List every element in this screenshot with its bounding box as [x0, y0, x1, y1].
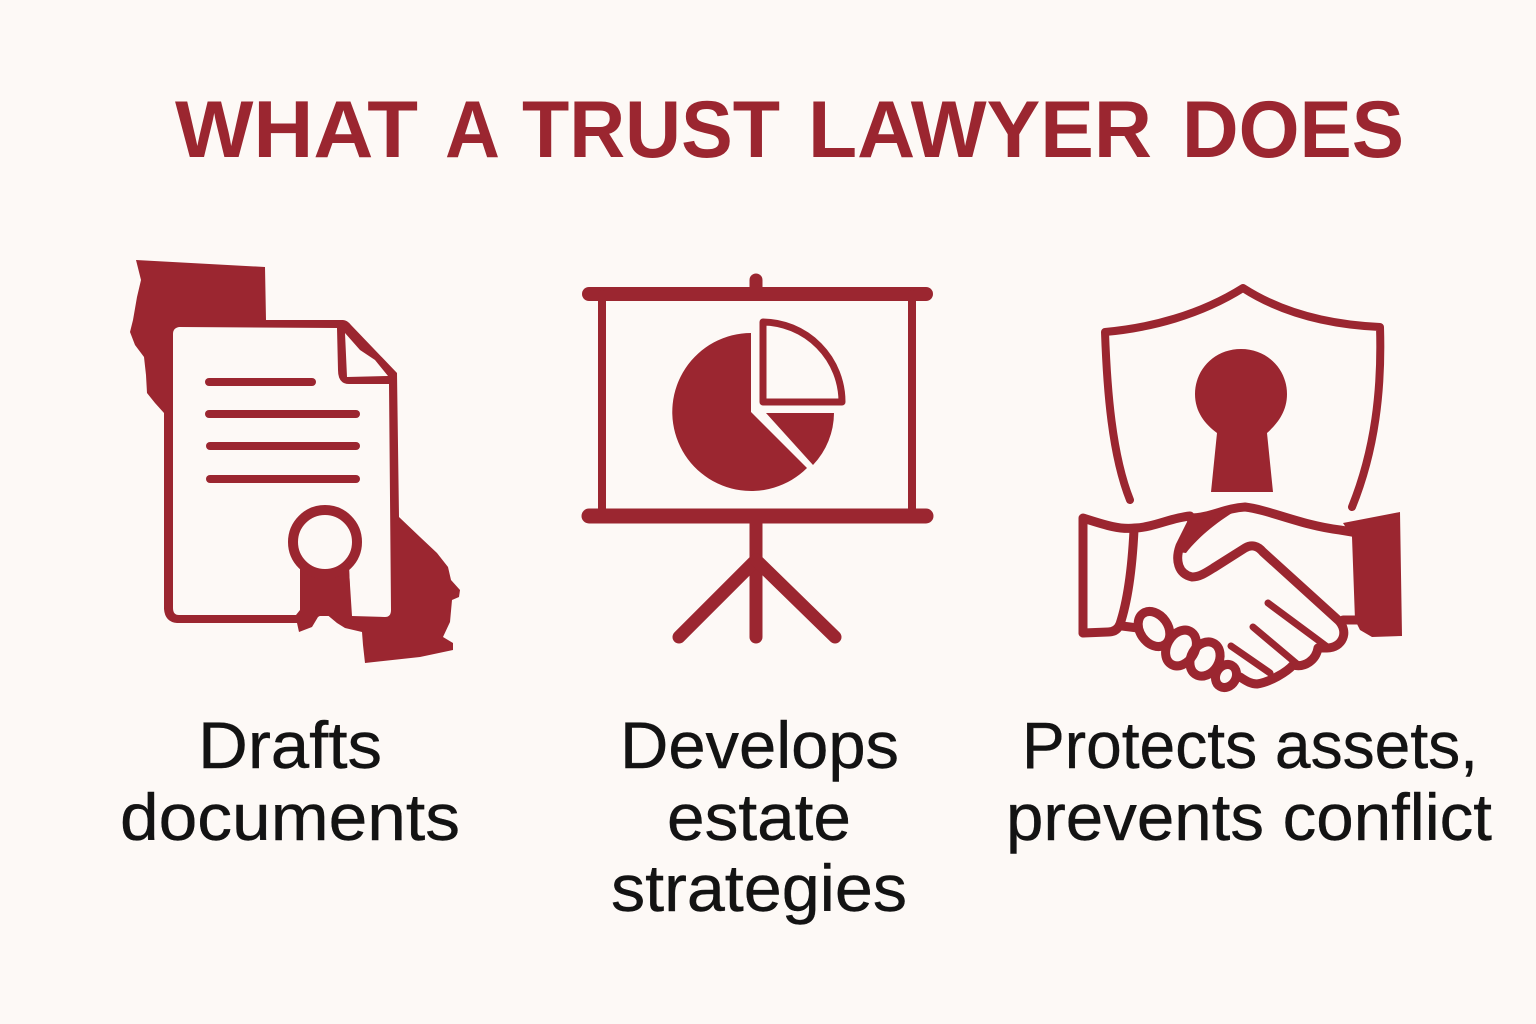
title: TRUST — [522, 85, 780, 175]
label: protects assets, prevents conflict: prevents conflict — [1006, 780, 1492, 854]
right cuff — [1343, 512, 1402, 637]
label: develops estate strategies — [611, 708, 907, 925]
pie chart — [672, 322, 842, 491]
label: develops estate strategies: strategies — [611, 851, 907, 925]
label: drafts documents: Drafts — [198, 708, 382, 782]
title: A — [445, 85, 500, 175]
icon: handshake — [1083, 507, 1402, 691]
panel: develops estate strategies — [589, 280, 926, 925]
title — [175, 85, 1404, 175]
text lines — [209, 382, 356, 479]
label: develops estate strategies: Develops — [620, 708, 899, 782]
certificate seal — [293, 510, 357, 616]
top hand — [1190, 507, 1352, 532]
icon: document over California map — [130, 260, 460, 663]
title: LAWYER — [808, 85, 1152, 175]
panel: drafts documents — [120, 260, 460, 854]
panel: protects assets, prevents conflict — [1006, 288, 1492, 854]
label: protects assets, prevents conflict — [1006, 708, 1492, 854]
thumb wedge — [1178, 508, 1240, 553]
label: drafts documents — [120, 708, 460, 854]
document sheet — [173, 327, 391, 617]
finger lines — [1231, 603, 1326, 673]
folded corner — [345, 333, 388, 377]
fingers — [1132, 605, 1176, 653]
keyhole — [1195, 349, 1287, 492]
left cuff — [1083, 516, 1190, 633]
label: develops estate strategies: estate — [667, 780, 851, 854]
icon: presentation board with pie chart — [589, 280, 926, 637]
label: drafts documents: documents — [120, 780, 460, 854]
title: DOES — [1182, 85, 1404, 175]
label: protects assets, prevents conflict: Protects assets, — [1022, 708, 1478, 782]
icon: shield with keyhole — [1105, 288, 1380, 507]
title: WHAT — [175, 85, 418, 175]
